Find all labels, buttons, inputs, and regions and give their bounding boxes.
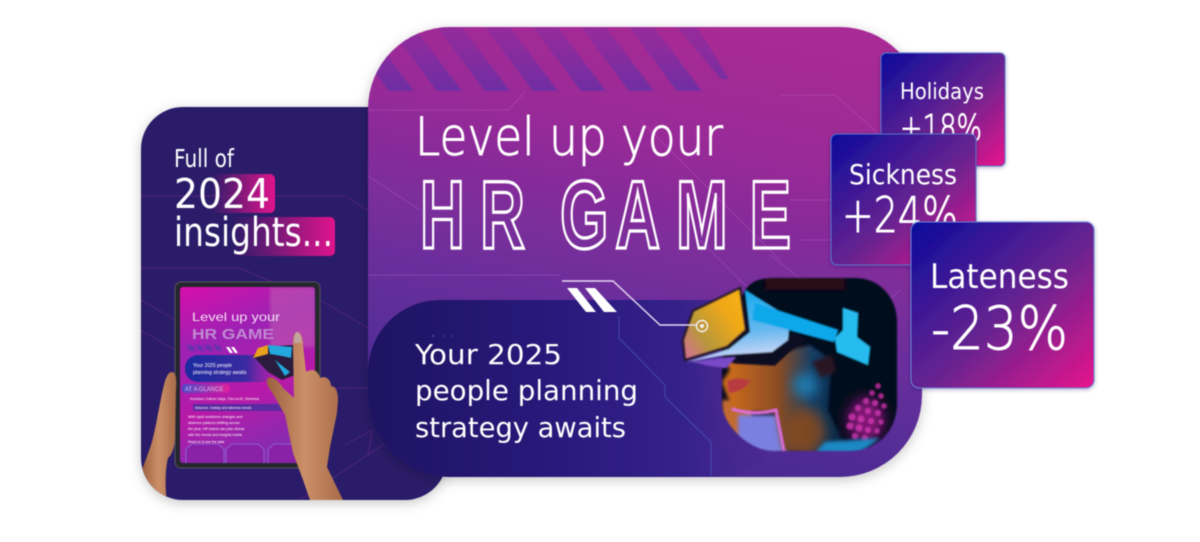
card: sickness +24%: +24% <box>842 187 958 244</box>
subtitle: 2025 people planning: strategy awaits <box>415 411 626 444</box>
tablet mockup: Your 2025 people <box>193 363 232 369</box>
tablet mockup: AT A GLANCE <box>185 387 223 393</box>
headset body <box>687 290 790 362</box>
headset strap <box>752 303 870 365</box>
visor <box>683 288 746 360</box>
headset shadow band <box>722 332 806 366</box>
photo: woman wearing VR headset <box>683 275 900 456</box>
tablet mockup: Inclusive Culture Days, Flex-to-fit, Sickness <box>190 397 259 401</box>
tablet mockup: Level up your <box>192 310 280 324</box>
tablet mockup: Absence, holiday and lateness trends <box>195 406 252 410</box>
title: level up your HR game <box>415 107 791 269</box>
icon: right hand tapping tablet <box>267 332 343 500</box>
lips <box>727 378 751 393</box>
card: lateness -23%: -23% <box>931 294 1068 364</box>
callout line with target marker <box>562 281 708 332</box>
tablet mockup: planning strategy awaits <box>193 370 247 376</box>
title: level up your HR game: HRGAME <box>420 161 791 269</box>
subtitle: 2025 people planning: Your 2025 <box>414 338 562 371</box>
icon: tablet chevrons <box>226 347 238 353</box>
card: holidays +18%: +18% <box>900 108 982 149</box>
card: lateness -23%: Lateness <box>930 257 1069 297</box>
panel: left insights card <box>141 107 447 500</box>
heading: full of 2024 insights: Full of <box>174 144 235 173</box>
tablet mockup: with the trends and insights inside <box>188 433 242 437</box>
tablet VR thumbnail <box>253 345 295 380</box>
title: level up your HR game: Level up your <box>415 107 723 168</box>
tablet mockup <box>175 282 320 468</box>
panel: main hero card <box>341 27 922 477</box>
card: holidays +18%: Holidays <box>900 80 984 105</box>
icon: left hand holding tablet <box>141 372 176 500</box>
tablet mockup: the year, HR teams can plan ahead <box>188 427 244 431</box>
heading: full of 2024 insights: 2024 <box>174 170 270 218</box>
tablet mockup: With rapid workforce changes and <box>188 415 242 419</box>
heading: full of 2024 insights: insights... <box>174 210 333 256</box>
card: lateness -23% <box>911 222 1094 388</box>
subtitle: 2025 people planning: people planning <box>415 374 638 407</box>
card: sickness +24% <box>831 134 976 265</box>
nose bridge <box>692 357 736 368</box>
tablet mockup: absence patterns shifting across <box>188 421 240 425</box>
card: holidays +18% <box>881 53 1005 166</box>
heading: full of 2024 insights <box>174 144 335 256</box>
subtitle: 2025 people planning <box>414 338 638 444</box>
icon: double chevrons <box>567 288 617 312</box>
tablet mockup: Read on to see the data <box>188 440 224 444</box>
card: sickness +24%: Sickness <box>849 158 957 191</box>
tablet mockup: HR GAME <box>192 326 274 343</box>
